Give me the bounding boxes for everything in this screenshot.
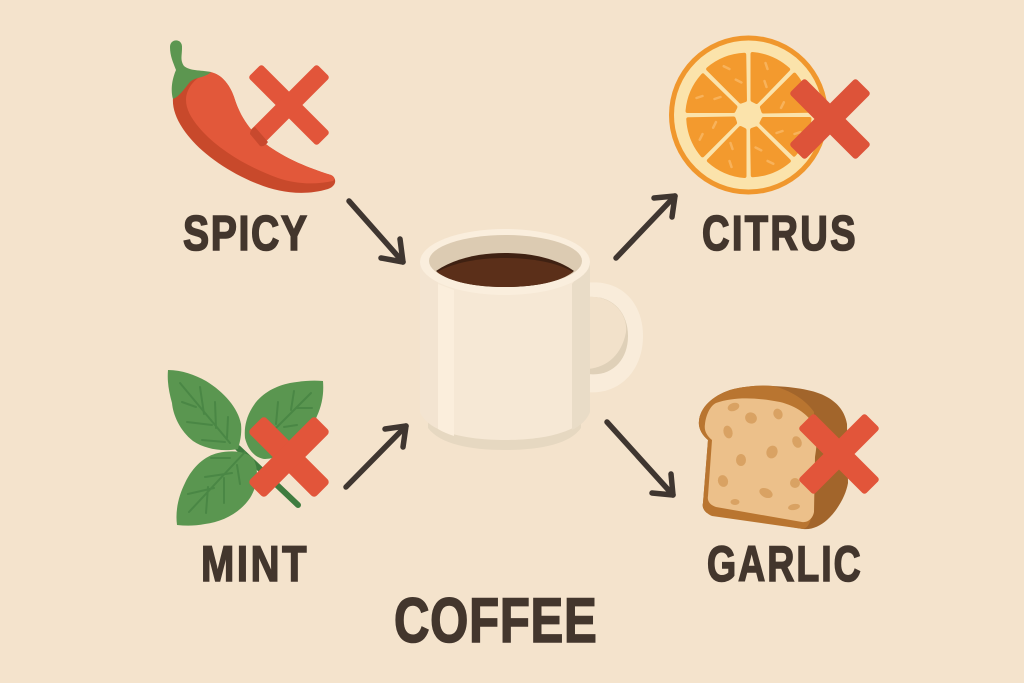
title: coffee: COFFEE: [394, 585, 597, 655]
label: citrus: CITRUS: [702, 207, 856, 261]
mint leaf: bottom: [176, 451, 257, 526]
bread front crust: [699, 386, 814, 529]
mug bright strip: [438, 284, 454, 436]
arrow: coffee to garlic: [607, 422, 673, 495]
arrow: mint to coffee: [346, 426, 406, 487]
label: mint: MINT: [201, 536, 307, 592]
mug inner wall: [429, 235, 582, 287]
chili body: [173, 72, 335, 193]
bread face: [705, 398, 817, 522]
bread side crust: [699, 386, 848, 529]
bread crumbs: [716, 401, 804, 511]
mug right shadow: [572, 262, 590, 430]
label: garlic: GARLIC: [707, 537, 861, 592]
mug base shadow: [428, 420, 581, 450]
mint leaf: top left: [168, 370, 241, 450]
mug handle: [585, 282, 643, 392]
mint leaf: right: [245, 381, 323, 459]
red cross: garlic: [773, 388, 905, 520]
coffee surface: [436, 253, 574, 287]
orange pith: [674, 40, 823, 190]
chili stem: [170, 40, 211, 99]
orange rind: [669, 36, 828, 194]
red cross: spicy: [220, 36, 358, 174]
arrow: spicy to coffee: [349, 201, 403, 262]
icon: coffee mug: [420, 229, 643, 450]
icon: bread slice with red cross: [699, 386, 905, 529]
icon: mint leaves with red cross: [168, 370, 355, 526]
label: spicy: SPICY: [183, 207, 307, 261]
mint stem: [238, 448, 298, 505]
red cross: mint: [223, 391, 355, 523]
mug body: [420, 262, 590, 440]
icon: orange slice with red cross: [669, 36, 896, 194]
arrow: coffee to citrus: [616, 196, 675, 258]
red cross: citrus: [764, 53, 896, 185]
mug left highlight: [420, 262, 438, 429]
mug rim: [420, 229, 590, 295]
orange segments: [677, 44, 820, 186]
icon: chili pepper with red cross: [170, 36, 358, 193]
orange pulp marks: [696, 63, 800, 167]
